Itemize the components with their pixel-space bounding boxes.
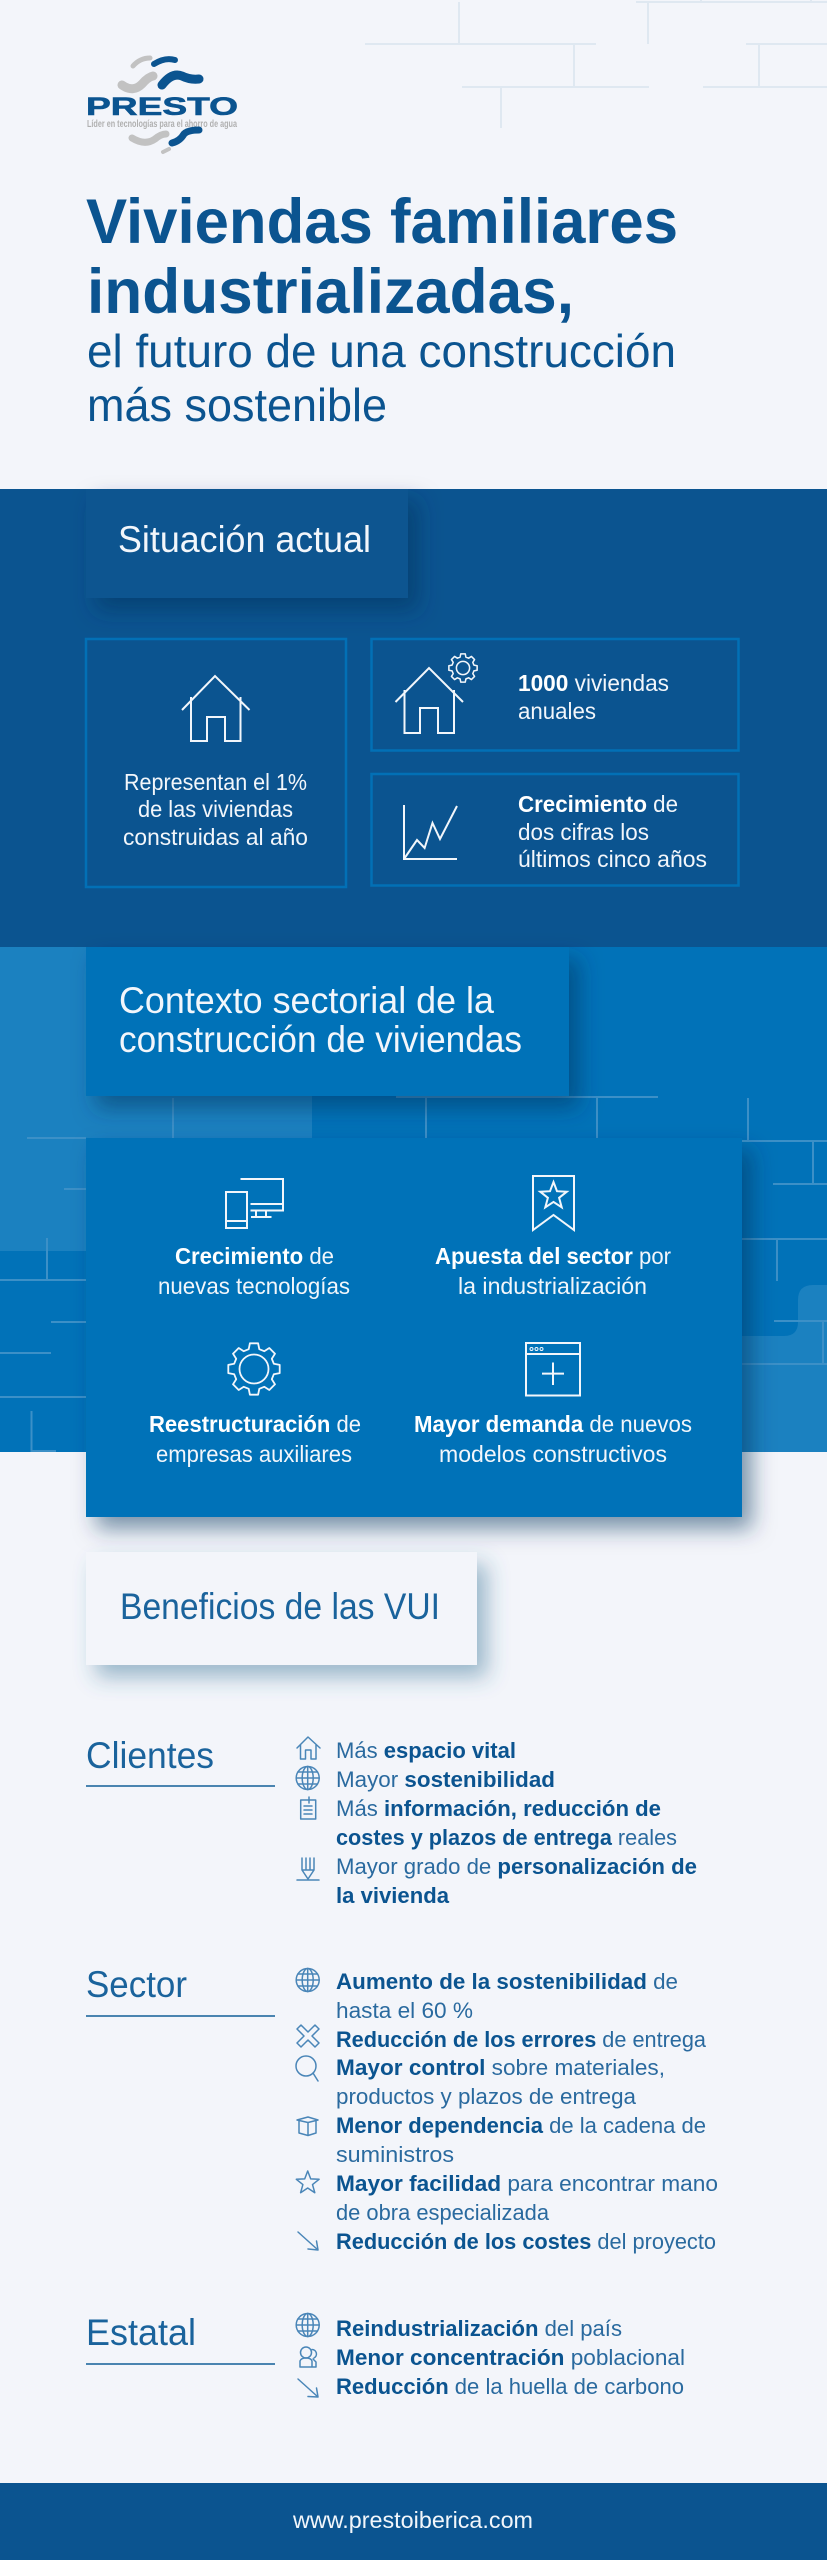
icon: magnifier: [296, 2056, 318, 2081]
label: sector: Sector: [86, 1964, 187, 2005]
panel: contexto sectorial: [0, 947, 827, 1517]
icon: star: [296, 2171, 319, 2193]
card: 1000 homes per year: anuales: [518, 698, 596, 724]
heading: beneficios de las VUI: Beneficios de las VUI: [120, 1586, 440, 1627]
footer: www.prestoiberica.com: [292, 2507, 533, 2533]
section: sector: [86, 1964, 718, 2254]
icon: pencil: [297, 1858, 319, 1880]
list: estatal: [336, 2316, 685, 2399]
factor: mayor demanda: modelos constructivos: [439, 1441, 667, 1467]
icon: globe: [296, 1968, 319, 1992]
title: [86, 187, 678, 431]
footer: [0, 2483, 827, 2560]
card: 1% of homes: Representan el 1%: [124, 769, 307, 795]
icon: globe: [296, 2314, 319, 2336]
list: clientes: costes y plazos de entrega reales: [336, 1825, 677, 1850]
label: estatal: Estatal: [86, 2312, 196, 2353]
list: clientes: Más espacio vital: [336, 1738, 516, 1763]
factor: nuevas tecnologías: nuevas tecnologías: [158, 1273, 350, 1299]
list: sector: de obra especializada: [336, 2200, 550, 2225]
card: 1% of homes: [86, 639, 346, 887]
logo: Presto: Líder en tecnologías para el ahorro de agua: [87, 119, 237, 130]
list: clientes: Más información, reducción de: [336, 1796, 661, 1821]
list: estatal: Menor concentración poblacional: [336, 2345, 685, 2370]
list: sector: Mayor facilidad para encontrar mano: [336, 2171, 718, 2196]
list: sector: Menor dependencia de la cadena de: [336, 2113, 706, 2138]
heading: situación actual: [86, 489, 408, 598]
list: sector: Mayor control sobre materiales,: [336, 2055, 665, 2080]
heading: beneficios de las VUI: [86, 1552, 477, 1665]
title: más sostenible: [87, 379, 387, 431]
heading: contexto sectorial: Contexto sectorial de la: [119, 980, 494, 1021]
list: clientes: [336, 1738, 697, 1908]
card panel: four factors: [86, 1138, 742, 1517]
icon: arrow: [298, 2379, 318, 2397]
card: 1% of homes: construidas al año: [123, 824, 308, 850]
icon: cross: [297, 2025, 319, 2047]
list: sector: [336, 1969, 718, 2254]
icon: box: [297, 2117, 318, 2136]
factor: reestructuración: empresas auxiliares: [156, 1441, 352, 1467]
card: growth: [372, 774, 738, 886]
list: sector: Reducción de los errores de entrega: [336, 2027, 707, 2052]
panel: situación actual: [0, 489, 827, 947]
factor: apuesta del sector: Apuesta del sector por: [435, 1243, 671, 1269]
icon: arrow: [298, 2232, 318, 2250]
list: sector: hasta el 60 %: [336, 1998, 473, 2023]
list: sector: Reducción de los costes del proyecto: [336, 2229, 716, 2254]
list: sector: suministros: [336, 2142, 454, 2167]
card: growth: Crecimiento de: [518, 791, 678, 817]
icon: people: [300, 2347, 316, 2367]
list: estatal: Reindustrialización del país: [336, 2316, 622, 2341]
label: clientes: Clientes: [86, 1735, 214, 1776]
logo: Presto: [86, 58, 238, 152]
card: 1000 homes per year: 1000 viviendas: [518, 670, 669, 696]
section: estatal: [86, 2312, 685, 2399]
title: Viviendas familiares: [86, 187, 678, 257]
list: clientes: la vivienda: [336, 1883, 450, 1908]
list: sector: Aumento de la sostenibilidad de: [336, 1969, 678, 1994]
factor: reestructuración: [149, 1343, 361, 1467]
factor: apuesta del sector: la industrialización: [458, 1273, 647, 1299]
heading: contexto sectorial: construcción de viviendas: [119, 1019, 522, 1060]
title: el futuro de una construcción: [87, 325, 676, 377]
factor: nuevas tecnologías: Crecimiento de: [175, 1243, 334, 1269]
section: clientes: [86, 1735, 697, 1908]
heading: contexto sectorial: [86, 947, 569, 1096]
factor: nuevas tecnologías: [158, 1179, 350, 1299]
logo: Presto: PRESTO: [86, 93, 238, 121]
icon: clipboard: [301, 1797, 316, 1819]
card: growth: dos cifras los: [518, 819, 649, 845]
factor: mayor demanda: [414, 1343, 692, 1467]
card: 1% of homes: de las viviendas: [138, 796, 293, 822]
list: estatal: Reducción de la huella de carbono: [336, 2374, 684, 2399]
title: industrializadas,: [87, 257, 574, 327]
card: 1000 homes per year: [372, 639, 738, 750]
list: clientes: Mayor grado de personalización de: [336, 1854, 697, 1879]
factor: reestructuración: Reestructuración de: [149, 1411, 361, 1437]
list: clientes: Mayor sostenibilidad: [336, 1767, 555, 1792]
heading: situación actual: Situación actual: [118, 519, 371, 560]
icon: house: [297, 1737, 320, 1759]
factor: mayor demanda: Mayor demanda de nuevos: [414, 1411, 692, 1437]
list: sector: productos y plazos de entrega: [336, 2084, 637, 2109]
factor: apuesta del sector: [435, 1176, 671, 1299]
icon: globe: [296, 1766, 319, 1790]
card: growth: últimos cinco años: [518, 846, 707, 872]
